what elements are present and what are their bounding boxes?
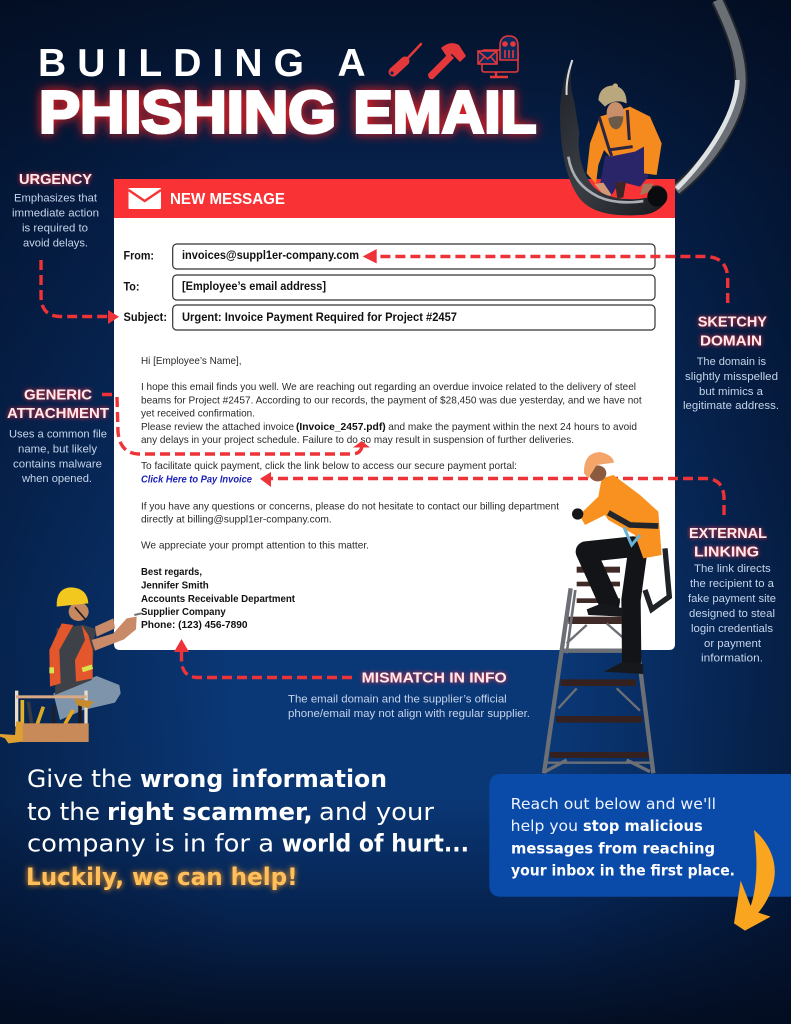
arrow: orange pointing down [734, 830, 775, 931]
icon: envelope [128, 188, 161, 209]
external linking description: login credentials [691, 623, 773, 635]
line 2: and your [319, 798, 434, 826]
urgency description: Emphasizes that [14, 193, 98, 205]
ladder [544, 567, 653, 773]
panel: email message [114, 179, 675, 650]
title line: building a: A [338, 42, 366, 85]
line 4: luckily: Luckily, we can help! [26, 863, 298, 891]
arrow: mismatch to signature [174, 639, 352, 678]
email body text: We appreciate your prompt attention to this matter. [141, 541, 369, 552]
hair [598, 85, 627, 107]
email body text: and make the payment within the next 24 hours to avoid [388, 422, 637, 433]
mismatch heading: MISMATCH IN INFO [362, 670, 507, 687]
arrow: generic attachment to invoice file [102, 394, 370, 454]
callout: external linking [688, 525, 776, 665]
mismatch description: phone/email may not align with regular supplier. [288, 708, 530, 720]
email body text: I hope this email finds you well. We are reaching out regarding an overdue invoice related to the delivery of steel [141, 382, 636, 393]
external linking heading: LINKING [694, 544, 759, 561]
callout: mismatch in info [288, 670, 530, 720]
email body text: If you have any questions or concerns, please do not hesitate to contact our billing department [141, 502, 559, 512]
external linking heading [689, 525, 767, 561]
line 2 [27, 798, 434, 826]
external linking description: designed to steal [689, 608, 775, 620]
sketchy domain description: but mimics a [699, 386, 764, 398]
urgency description: is required to [22, 222, 88, 234]
external linking description: fake payment site [688, 593, 776, 605]
generic attachment description: when opened. [21, 473, 92, 485]
email body text [141, 356, 642, 552]
toolbox [0, 691, 94, 743]
urgency description [12, 193, 99, 250]
from field [124, 244, 655, 269]
sketchy domain description [683, 356, 779, 412]
email body text: Please review the attached invoice [141, 422, 294, 433]
sketchy domain heading: DOMAIN [700, 333, 762, 350]
title line: building a: BUILDING [38, 42, 304, 85]
title line: phishing email: EMAIL [354, 80, 536, 146]
generic attachment description [9, 429, 107, 485]
hook: back shank [676, 0, 741, 190]
boots [587, 603, 643, 674]
email body text: directly at billing@suppl1er-company.com. [141, 515, 332, 526]
navy trousers [600, 138, 648, 195]
callout: sketchy domain [683, 314, 779, 412]
generic attachment description: name, but likely [18, 444, 97, 456]
from field: invoices@suppl1er-company.com [182, 250, 359, 262]
title line: phishing email: PHISHING [39, 80, 336, 146]
call to action text: your inbox in the first place. [511, 862, 735, 880]
external linking description: information. [701, 653, 763, 665]
call to action text: stop malicious [583, 817, 703, 835]
orange safety vest [49, 623, 93, 687]
external linking description: The link directs [694, 563, 771, 575]
generic attachment heading [7, 386, 109, 422]
external linking description: or payment [704, 638, 762, 650]
icon: screwdriver [390, 44, 421, 75]
callout: urgency [12, 171, 99, 250]
email body text: Hi [Employee’s Name], [141, 356, 242, 367]
line 3 [27, 830, 469, 858]
email body text: Click Here to Pay Invoice [141, 475, 252, 486]
email body text: yet received confirmation. [141, 408, 255, 420]
email body text: any delays in your project schedule. Failure to do so may result in suspension of further deliveries. [141, 435, 574, 446]
grey shirt [55, 625, 97, 695]
generic attachment description: contains malware [13, 459, 102, 471]
generic attachment heading: ATTACHMENT [7, 405, 109, 422]
line 1: wrong information [140, 765, 387, 793]
email signature: Jennifer Smith [141, 580, 209, 592]
email signature: Supplier Company [141, 607, 226, 618]
to field [124, 275, 655, 300]
straps [599, 110, 633, 156]
jeans [53, 676, 121, 720]
call to action text: messages from reaching [511, 839, 715, 857]
closing statement [26, 765, 469, 891]
generic attachment description: Uses a common file [9, 429, 107, 441]
scraper tool [134, 613, 142, 615]
title line: phishing email [39, 80, 536, 146]
arrow: external linking to invoice link [260, 472, 724, 515]
line 3: world of hurt... [282, 830, 469, 858]
urgency description: avoid delays. [23, 238, 88, 250]
email card body [114, 179, 675, 650]
line 2: to the [27, 798, 100, 826]
hands and boot [594, 183, 612, 197]
head [607, 102, 624, 123]
hook: front barb and bend [560, 59, 667, 215]
sketchy domain heading [698, 314, 767, 350]
external linking description: the recipient to a [690, 578, 775, 590]
subject field [124, 305, 655, 330]
glove [572, 508, 583, 520]
arrow: urgency to subject [41, 260, 119, 324]
urgency heading: URGENCY [19, 171, 92, 188]
arms reaching to email [92, 617, 137, 651]
orange shirt [587, 107, 662, 184]
urgency description: immediate action [12, 208, 99, 220]
header text: new message: NEW MESSAGE [170, 191, 285, 208]
orange shirt [579, 475, 662, 558]
mismatch description: The email domain and the supplier’s official [288, 694, 507, 706]
subject field: Subject: [124, 312, 167, 324]
to field: To: [124, 282, 140, 294]
black work trousers [586, 547, 638, 660]
to field: [Employee’s email address] [182, 281, 326, 293]
external linking description [688, 563, 776, 665]
email signature: Phone: (123) 456-7890 [141, 620, 248, 631]
line 2: right scammer, [107, 798, 313, 826]
icon: computer with scam envelope [478, 36, 518, 77]
title [38, 42, 536, 146]
mismatch description [288, 694, 530, 720]
email signature [141, 567, 295, 631]
icon: hammer [428, 43, 466, 79]
call to action text: Reach out below and we'll [511, 795, 716, 813]
arrow: sketchy domain to from field [363, 249, 728, 303]
yellow hard hat [57, 587, 88, 607]
generic attachment heading: GENERIC [24, 386, 92, 404]
from field: From: [124, 250, 154, 262]
call to action text: help you [511, 817, 578, 835]
email body text: (Invoice_2457.pdf) [296, 422, 386, 433]
sketchy domain heading: SKETCHY [698, 314, 767, 331]
callout: generic attachment [7, 386, 109, 485]
line 3: company is in for a [27, 830, 274, 858]
back strap [645, 548, 669, 609]
email header bar [114, 179, 675, 218]
external linking heading: EXTERNAL [689, 525, 767, 542]
line 1: Give the [27, 765, 132, 793]
email body text: To facilitate quick payment, click the link below to access our secure payment portal: [141, 461, 517, 472]
call to action box [489, 774, 791, 897]
worker with toolbox [0, 587, 142, 743]
email body text: beams for Project #2457. According to our records, the payment of $28,450 was due yesterday, and we have not [141, 395, 642, 406]
email signature: Best regards, [141, 567, 202, 578]
panel: call to action [489, 774, 791, 931]
worker on ladder [544, 452, 669, 773]
email signature: Accounts Receivable Department [141, 594, 295, 605]
sketchy domain description: legitimate address. [683, 400, 779, 412]
sketchy domain description: The domain is [697, 356, 766, 368]
worker kneeling on email header [587, 83, 662, 198]
face and helmet [589, 465, 606, 481]
beard [608, 116, 623, 129]
call to action text [511, 795, 735, 880]
harness [608, 513, 658, 526]
subject field: Urgent: Invoice Payment Required for Project #2457 [182, 312, 457, 324]
chin strap [75, 607, 86, 620]
sketchy domain description: slightly misspelled [685, 371, 778, 383]
head [69, 602, 89, 621]
line 1 [27, 765, 387, 793]
